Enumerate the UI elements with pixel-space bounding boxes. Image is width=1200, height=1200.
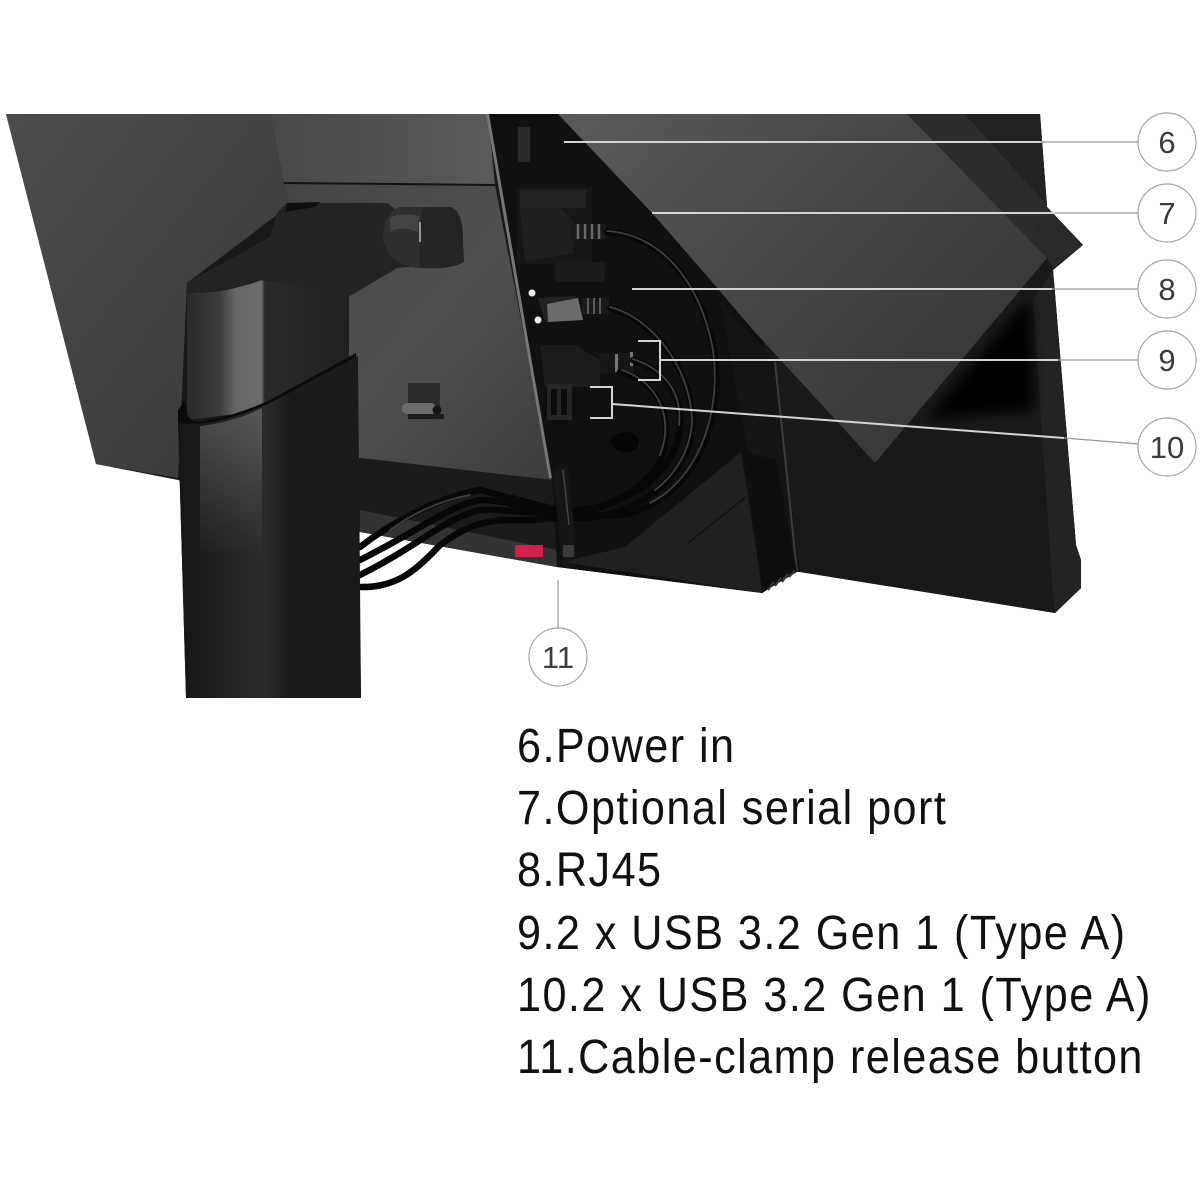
power port <box>518 127 530 162</box>
serial port connector <box>517 188 606 282</box>
callout numbers: 8 <box>1158 272 1176 307</box>
callout numbers: 9 <box>1158 343 1176 378</box>
callout numbers: 6 <box>1158 125 1176 160</box>
stand arm and upper post <box>187 202 463 420</box>
outer callout leaders <box>558 142 1139 628</box>
callout numbers <box>542 125 1184 675</box>
stand knob <box>383 207 464 268</box>
legend text list: 6.Power in <box>517 720 736 773</box>
cable clamp and release button <box>515 467 577 566</box>
monitor right section <box>770 114 1083 613</box>
RJ45 connector <box>528 290 609 324</box>
base wedge <box>562 452 797 593</box>
cables <box>360 231 716 587</box>
monitor silhouette <box>6 114 1083 613</box>
legend text list: 8.RJ45 <box>517 844 663 897</box>
callout badges <box>529 113 1196 686</box>
callout lines <box>564 142 1064 438</box>
legend text list: 11.Cable-clamp release button <box>517 1031 1144 1084</box>
legend text list: 9.2 x USB 3.2 Gen 1 (Type A) <box>517 907 1126 960</box>
USB connectors <box>540 345 639 452</box>
hinged cover <box>558 114 1047 463</box>
stand lower sleeve <box>178 353 361 698</box>
callout numbers: 11 <box>542 640 574 675</box>
legend text list <box>517 720 1152 1084</box>
callout numbers: 7 <box>1158 196 1176 231</box>
lock slot bracket <box>402 383 444 419</box>
monitor back shell <box>6 114 557 567</box>
legend text list: 7.Optional serial port <box>517 782 947 835</box>
legend text list: 10.2 x USB 3.2 Gen 1 (Type A) <box>517 969 1152 1022</box>
callout numbers: 10 <box>1150 430 1184 465</box>
port panel <box>486 114 800 593</box>
